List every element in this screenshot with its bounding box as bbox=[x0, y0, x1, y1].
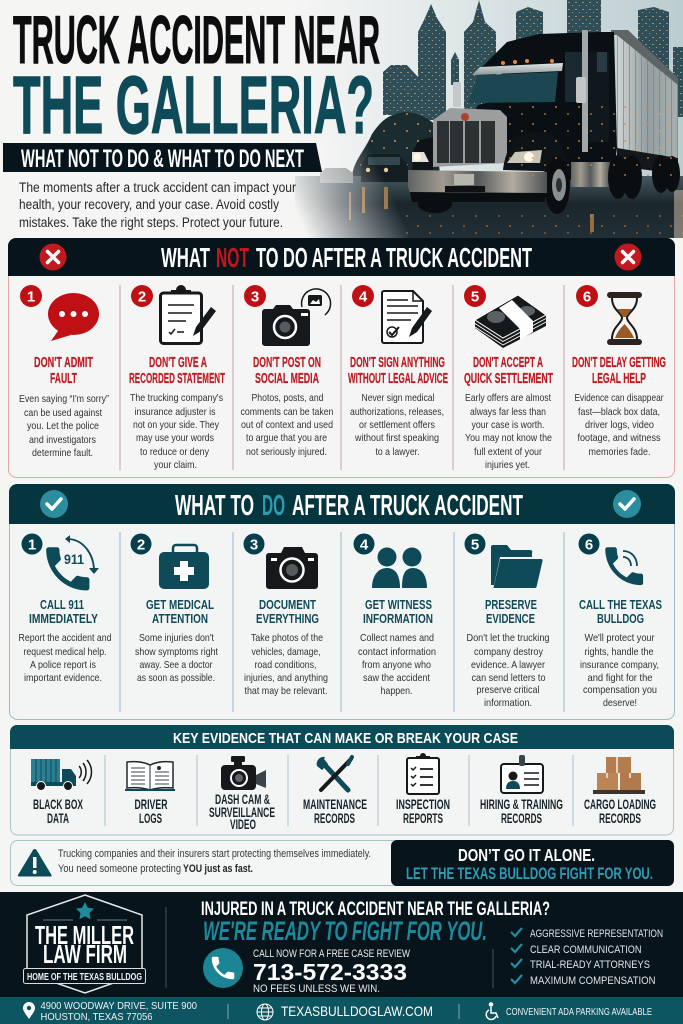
heading bbox=[256, 598, 319, 626]
label: VIDEO bbox=[230, 817, 256, 832]
address bbox=[40, 1000, 197, 1023]
label: INSPECTION bbox=[396, 797, 450, 812]
number badge: 3 bbox=[250, 536, 258, 554]
label: RECORDS bbox=[599, 811, 641, 826]
label bbox=[584, 797, 656, 826]
body text bbox=[580, 632, 659, 709]
heading: WITHOUT LEGAL ADVICE bbox=[348, 371, 448, 387]
number badge bbox=[244, 534, 264, 554]
heading bbox=[34, 355, 93, 387]
body text bbox=[135, 632, 218, 684]
front wheels bbox=[418, 195, 452, 213]
body text: deserve! bbox=[603, 697, 637, 709]
icon: phone with signal bbox=[605, 547, 643, 585]
body text bbox=[465, 392, 552, 471]
icon: phone with 911: 911 bbox=[64, 551, 84, 567]
body text: rights, handle the bbox=[584, 646, 654, 658]
label bbox=[134, 797, 168, 826]
number badge bbox=[578, 534, 600, 554]
body text: Photos, posts, and bbox=[252, 392, 324, 404]
number badge: 4 bbox=[360, 536, 369, 554]
icon: speech bubble bbox=[48, 293, 99, 341]
city lights on truck bbox=[500, 100, 678, 180]
body text: Take photos of the bbox=[251, 632, 323, 644]
label bbox=[396, 797, 450, 826]
heading: GET MEDICAL bbox=[146, 598, 214, 612]
warning text: Trucking companies and their insurers start protecting themselves immediately. bbox=[58, 848, 371, 860]
rear wheels bbox=[608, 155, 680, 199]
body text: your claim. bbox=[154, 459, 197, 471]
label: SURVEILLANCE bbox=[209, 805, 275, 820]
body text: fast—black box data, bbox=[578, 406, 660, 418]
phone block bbox=[253, 948, 410, 995]
number badge: 2 bbox=[137, 536, 145, 554]
icon: open log book bbox=[125, 762, 175, 790]
heading bbox=[29, 598, 99, 626]
logo: HOME OF THE TEXAS BULLDOG bbox=[27, 971, 142, 983]
body text: you. Let the police bbox=[27, 420, 99, 432]
heading: DON'T ACCEPT A bbox=[473, 355, 543, 371]
number badge: 6 bbox=[585, 536, 593, 554]
fenders bbox=[412, 137, 433, 170]
icon: check left bbox=[40, 490, 68, 518]
body text bbox=[18, 632, 112, 684]
header bar bbox=[8, 238, 675, 276]
body text: show symptoms right bbox=[135, 646, 218, 658]
body text bbox=[244, 632, 328, 697]
body text: out of context and used bbox=[241, 419, 333, 431]
heading: RECORDED STATEMENT bbox=[129, 371, 225, 387]
item 6 bbox=[572, 285, 666, 458]
panel: what to do bbox=[9, 484, 675, 720]
number badge: 2 bbox=[138, 288, 146, 306]
SUV bbox=[361, 154, 408, 182]
number badge: 3 bbox=[251, 288, 259, 306]
heading: FAULT bbox=[50, 371, 77, 387]
number badge bbox=[20, 285, 42, 307]
body text: The trucking company's bbox=[130, 392, 223, 404]
body text: always far less than bbox=[470, 406, 546, 418]
footer tagline: WE'RE READY TO FIGHT FOR YOU. bbox=[203, 916, 487, 946]
evidence: hiring and training bbox=[480, 755, 563, 826]
icon: first aid kit bbox=[159, 545, 209, 589]
body text: compensation you bbox=[583, 684, 657, 696]
body text: We'll protect your bbox=[584, 632, 655, 644]
heading: SOCIAL MEDIA bbox=[255, 371, 319, 387]
body text: insurance adjuster is bbox=[134, 406, 216, 418]
do item 3 bbox=[244, 534, 328, 697]
body text: vehicles, damage, bbox=[252, 646, 320, 658]
label: DRIVER bbox=[134, 797, 168, 812]
icon: dash cam bbox=[221, 756, 266, 790]
heading: DON'T POST ON bbox=[253, 355, 321, 371]
heading: DOCUMENT bbox=[259, 598, 316, 612]
body text: contact information bbox=[358, 646, 436, 658]
heading: DON'T GIVE A bbox=[149, 355, 207, 371]
body text: your case is worth. bbox=[472, 419, 544, 431]
address: 4900 WOODWAY DRIVE, SUITE 900 bbox=[40, 1000, 197, 1012]
label: REPORTS bbox=[403, 811, 443, 826]
item 5 bbox=[464, 285, 553, 471]
section heading: DO bbox=[262, 490, 285, 522]
icon: hourglass bbox=[607, 292, 642, 345]
body text: Report the accident and bbox=[18, 632, 112, 644]
body text bbox=[574, 392, 664, 458]
body text: driver logs, video bbox=[585, 419, 654, 431]
label bbox=[480, 797, 563, 826]
body text: and fight for the bbox=[588, 672, 653, 684]
label bbox=[33, 797, 83, 826]
heading bbox=[253, 355, 321, 387]
number badge: 5 bbox=[471, 288, 479, 306]
body text: as soon as possible. bbox=[137, 672, 215, 684]
logo bbox=[24, 895, 146, 993]
body text: injuries yet. bbox=[485, 459, 530, 471]
item 1 bbox=[19, 285, 109, 459]
address: HOUSTON, TEXAS 77056 bbox=[40, 1011, 153, 1023]
body text: authorizations, releases, bbox=[350, 406, 444, 418]
body text: determine fault. bbox=[32, 447, 93, 459]
do item 5 bbox=[464, 534, 550, 709]
number badge bbox=[130, 534, 152, 554]
callout: don't go it alone: DON’T GO IT ALONE. bbox=[458, 845, 595, 865]
do item 6 bbox=[578, 534, 662, 709]
phone block: NO FEES UNLESS WE WIN. bbox=[253, 983, 380, 995]
label bbox=[209, 792, 275, 832]
heading: PRESERVE bbox=[485, 598, 537, 612]
section heading bbox=[161, 242, 532, 273]
heading bbox=[363, 598, 433, 626]
body text: can be used against bbox=[24, 407, 102, 419]
evidence: maintenance bbox=[303, 757, 367, 826]
body text bbox=[240, 392, 334, 458]
heading: LEGAL HELP bbox=[592, 371, 646, 387]
heading: QUICK SETTLEMENT bbox=[464, 371, 553, 387]
body text: to a lawyer. bbox=[376, 446, 420, 458]
body text: may use your words bbox=[136, 432, 214, 444]
body text bbox=[466, 632, 550, 709]
number badge: 4 bbox=[359, 288, 368, 306]
icon: document and pen bbox=[382, 291, 432, 343]
bumper bbox=[408, 170, 547, 193]
icon: accessibility bbox=[486, 1003, 498, 1019]
heading bbox=[464, 355, 553, 387]
body text: away. See a doctor bbox=[140, 659, 213, 671]
evidence: dash cam bbox=[209, 756, 275, 832]
header bar bbox=[10, 725, 674, 749]
visor bbox=[472, 63, 563, 75]
body text: Don't let the trucking bbox=[466, 632, 550, 644]
body text: to reduce or deny bbox=[140, 446, 210, 458]
icon: red x right bbox=[614, 244, 642, 270]
label: LOGS bbox=[139, 811, 162, 826]
number badge: 6 bbox=[583, 288, 591, 306]
panel: key evidence bbox=[10, 725, 674, 835]
number badge bbox=[352, 285, 374, 307]
do item 1 bbox=[18, 534, 112, 684]
body text bbox=[358, 632, 436, 697]
heading bbox=[146, 598, 214, 626]
number badge bbox=[464, 534, 486, 554]
phone block: 713-572-3333 bbox=[253, 959, 407, 985]
benefits checklist: TRIAL-READY ATTORNEYS bbox=[530, 959, 650, 971]
subtitle banner: WHAT NOT TO DO & WHAT TO DO NEXT bbox=[21, 145, 304, 173]
body text: company destroy bbox=[474, 646, 544, 658]
callout: don't go it alone bbox=[391, 840, 674, 886]
icon: truck with signal bbox=[31, 759, 92, 790]
fuel tank bbox=[571, 162, 610, 187]
body text: information. bbox=[484, 697, 532, 709]
icon: camera bbox=[266, 547, 318, 589]
subtitle banner bbox=[3, 143, 322, 173]
item 4 bbox=[348, 285, 448, 458]
number badge bbox=[131, 285, 153, 307]
phone block: CALL NOW FOR A FREE CASE REVIEW bbox=[253, 948, 410, 960]
body text bbox=[19, 393, 109, 459]
icon: globe bbox=[257, 1004, 273, 1020]
label: RECORDS bbox=[314, 811, 355, 826]
body text: evidence. A lawyer bbox=[471, 659, 545, 671]
body text: footage, and witness bbox=[578, 432, 660, 444]
body text: can send letters to bbox=[472, 672, 546, 684]
body text: preserve critical bbox=[476, 684, 540, 696]
evidence: driver logs bbox=[125, 762, 175, 826]
windshield bbox=[468, 72, 558, 103]
heading bbox=[129, 355, 225, 387]
header bar bbox=[9, 484, 675, 524]
label: BLACK BOX bbox=[33, 797, 83, 812]
body text: Never sign medical bbox=[362, 392, 434, 404]
icon: checklist clipboard bbox=[407, 753, 439, 794]
number badge bbox=[464, 285, 486, 307]
heading bbox=[485, 598, 537, 626]
number badge: 1 bbox=[28, 536, 36, 554]
label: RECORDS bbox=[501, 811, 542, 826]
number badge bbox=[576, 285, 598, 307]
number badge bbox=[22, 534, 42, 554]
icon: phone with 911 bbox=[46, 535, 99, 590]
heading bbox=[579, 598, 662, 626]
body text: to argue that you are bbox=[246, 432, 327, 444]
section heading: WHAT bbox=[161, 242, 210, 273]
icon: red x left bbox=[40, 244, 66, 270]
number badge bbox=[354, 534, 374, 554]
body text: road conditions, bbox=[254, 659, 316, 671]
heading: EVERYTHING bbox=[256, 612, 319, 626]
item 2 bbox=[129, 285, 225, 471]
icon: phone circle bbox=[203, 948, 243, 988]
panel: what not to do bbox=[8, 238, 675, 478]
icon: clipboard and pen bbox=[160, 285, 216, 344]
section heading: AFTER A TRUCK ACCIDENT bbox=[292, 490, 523, 522]
icon: check right bbox=[613, 490, 641, 518]
do item 2 bbox=[130, 534, 218, 684]
icon: map pin bbox=[23, 1002, 35, 1019]
heading: DON'T ADMIT bbox=[34, 355, 93, 371]
evidence: cargo loading bbox=[584, 757, 656, 826]
heading: INFORMATION bbox=[363, 612, 433, 626]
heading: EVIDENCE bbox=[486, 612, 535, 626]
small car bbox=[320, 168, 353, 183]
body text: Even saying “I'm sorry” bbox=[19, 393, 109, 405]
heading: ATTENTION bbox=[152, 612, 208, 626]
website: TEXASBULLDOGLAW.COM bbox=[281, 1003, 433, 1019]
evidence: black box data bbox=[31, 759, 92, 826]
marker lights bbox=[501, 59, 554, 65]
hero image: truck on a wet road with city skyline bbox=[290, 0, 683, 238]
body text: or settlement offers bbox=[359, 419, 435, 431]
item 3 bbox=[240, 285, 334, 458]
address bar bbox=[0, 997, 683, 1024]
number badge bbox=[244, 285, 266, 307]
logo: LAW FIRM bbox=[43, 939, 127, 969]
body text: saw the accident bbox=[363, 672, 430, 684]
icon: warning triangle bbox=[18, 849, 52, 877]
body text: Some injuries don't bbox=[139, 632, 214, 644]
label: MAINTENANCE bbox=[303, 797, 367, 812]
trees bbox=[352, 112, 440, 176]
body text: not on your side. They bbox=[133, 419, 220, 431]
benefits checklist: MAXIMUM COMPENSATION bbox=[530, 975, 656, 987]
body text: injuries, and anything bbox=[244, 672, 328, 684]
skyline buildings bbox=[383, 0, 683, 120]
title line 2: THE GALLERIA? bbox=[13, 60, 374, 151]
body text: full extent of your bbox=[474, 446, 542, 458]
intro paragraph: health, your recovery, and your case. Avoid costly bbox=[19, 197, 279, 212]
warning text: You need someone protecting bbox=[58, 863, 181, 875]
headlights bbox=[412, 152, 429, 162]
heading bbox=[348, 355, 448, 387]
label: DATA bbox=[47, 811, 69, 826]
number badge: 1 bbox=[27, 288, 35, 306]
number badge: 5 bbox=[471, 536, 479, 554]
evidence: inspection bbox=[396, 753, 450, 826]
icon: id badge bbox=[501, 755, 543, 793]
title bbox=[13, 2, 380, 151]
body text: important evidence. bbox=[24, 672, 102, 684]
wet road bbox=[295, 176, 683, 238]
section heading bbox=[175, 490, 523, 522]
body text: without first speaking bbox=[354, 432, 439, 444]
body text: You may not know the bbox=[465, 432, 552, 444]
heading: BULLDOG bbox=[597, 612, 644, 626]
section heading: WHAT TO bbox=[175, 490, 254, 522]
callout: warning bbox=[10, 840, 410, 886]
hood and grille bbox=[433, 108, 507, 167]
intro paragraph: mistakes. Take the right steps. Protect your future. bbox=[19, 215, 283, 230]
icon: stack of cash bbox=[475, 295, 546, 348]
body text bbox=[350, 392, 444, 458]
body text: from anyone who bbox=[362, 659, 431, 671]
section heading: NOT bbox=[216, 242, 249, 273]
heading: GET WITNESS bbox=[365, 598, 432, 612]
body text: that may be relevant. bbox=[244, 685, 328, 697]
cab body bbox=[463, 32, 617, 180]
section heading: KEY EVIDENCE THAT CAN MAKE OR BREAK YOUR CASE bbox=[173, 730, 518, 747]
body text: request medical help. bbox=[24, 646, 106, 658]
mirrors and exhaust stack bbox=[582, 30, 588, 152]
heading: IMMEDIATELY bbox=[29, 612, 99, 626]
icon: folder bbox=[491, 545, 543, 588]
label bbox=[303, 797, 367, 826]
benefits checklist bbox=[511, 928, 663, 987]
body text: insurance company, bbox=[580, 659, 659, 671]
icon: crossed wrench and screwdriver bbox=[317, 757, 352, 790]
body text: A police report is bbox=[30, 659, 96, 671]
benefits checklist: CLEAR COMMUNICATION bbox=[530, 944, 642, 956]
icon: two people bbox=[372, 548, 427, 588]
warning text: YOU just as fast. bbox=[183, 863, 253, 875]
icon: camera with photo bubble bbox=[262, 289, 331, 346]
body text: not seriously injured. bbox=[246, 446, 327, 458]
body text: happen. bbox=[380, 685, 412, 697]
intro paragraph bbox=[19, 180, 296, 230]
warning text bbox=[58, 848, 371, 875]
body text: and investigators bbox=[29, 434, 96, 446]
body text: memories fade. bbox=[588, 446, 650, 458]
icon: stacked boxes on pallet bbox=[593, 757, 645, 794]
body text: comments can be taken bbox=[240, 406, 334, 418]
label: HIRING & TRAINING bbox=[480, 797, 563, 812]
footer bbox=[0, 892, 683, 1024]
logo: THE MILLER bbox=[35, 920, 134, 950]
body text bbox=[130, 392, 223, 471]
intro paragraph: The moments after a truck accident can impact your bbox=[19, 180, 296, 195]
body text: Early offers are almost bbox=[465, 392, 551, 404]
heading: CALL 911 bbox=[40, 598, 84, 612]
heading: CALL THE TEXAS bbox=[579, 598, 662, 612]
do item 4 bbox=[354, 534, 436, 697]
label: DASH CAM & bbox=[215, 792, 270, 807]
heading: DON'T SIGN ANYTHING bbox=[350, 355, 445, 371]
heading bbox=[572, 355, 666, 387]
trailer bbox=[617, 35, 678, 158]
body text: Collect names and bbox=[360, 632, 434, 644]
